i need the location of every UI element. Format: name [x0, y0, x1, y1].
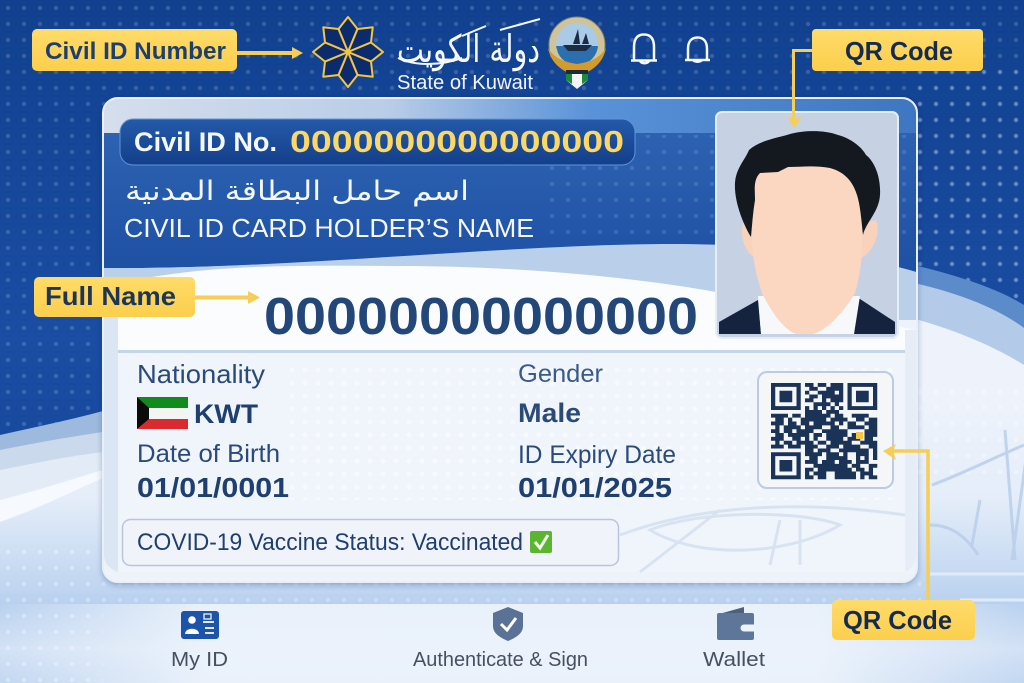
bridge backdrop	[930, 430, 1024, 600]
label text: Full Name	[45, 281, 176, 311]
label: qr code bottom	[832, 600, 975, 640]
gender value: Male	[518, 398, 581, 428]
date of birth label: Date of Birth	[137, 440, 280, 468]
label text: QR Code	[843, 605, 952, 635]
nationality label: Nationality	[137, 359, 265, 389]
card blue header	[104, 133, 916, 272]
arabic calligraphy: دولة الكويت	[397, 27, 540, 72]
check icon	[530, 531, 552, 553]
emblem disc	[556, 23, 598, 65]
nav: wallet	[703, 607, 765, 671]
jacket	[719, 297, 895, 334]
label: qr code top	[812, 29, 983, 71]
wallet label: Wallet	[703, 649, 765, 671]
calligraphy flourish	[398, 19, 540, 64]
shield icon	[493, 607, 523, 641]
nationality value: KWT	[194, 399, 259, 429]
card bridge watermark	[620, 507, 905, 572]
vaccine status box	[122, 520, 618, 566]
expiry value: 01/01/2025	[518, 472, 672, 503]
state of kuwait: State of Kuwait	[397, 72, 533, 94]
flag of Kuwait	[137, 397, 188, 429]
hair	[735, 131, 880, 237]
authenticate label: Authenticate & Sign	[413, 649, 588, 671]
qr code	[758, 372, 893, 488]
photo	[716, 112, 898, 338]
arabic holder name: اسم حامل البطاقة المدنية	[125, 176, 469, 207]
my id label: My ID	[171, 649, 228, 671]
civil id number pill	[120, 119, 635, 165]
civil id label: Civil ID No.	[134, 127, 277, 157]
qr modules	[771, 385, 877, 477]
english holder name: CIVIL ID CARD HOLDER’S NAME	[124, 213, 534, 243]
logo star	[313, 17, 383, 87]
emblem lower wings	[548, 48, 606, 77]
expiry label: ID Expiry Date	[518, 441, 676, 469]
label text: QR Code	[845, 36, 953, 66]
face	[752, 160, 862, 334]
card body	[103, 98, 917, 582]
nav: my id	[171, 611, 228, 671]
ID card	[103, 98, 917, 582]
card light wave	[104, 244, 916, 320]
kuwait emblem	[548, 17, 606, 89]
wallet icon	[717, 607, 754, 640]
label: civil id number	[32, 29, 237, 71]
qr card	[758, 372, 893, 488]
gender label: Gender	[518, 360, 603, 388]
dhow	[563, 29, 592, 51]
arrow: civil id number	[237, 47, 303, 59]
my id icon	[181, 611, 219, 639]
shield	[566, 71, 588, 89]
vaccine status text: COVID-19 Vaccine Status: Vaccinated	[137, 529, 523, 556]
lower card panel	[118, 352, 905, 572]
ears	[742, 220, 878, 258]
shirt	[758, 296, 860, 334]
civil id digits: 0000000000000000	[290, 124, 624, 159]
date of birth value: 01/01/0001	[137, 472, 289, 503]
bell icon 2	[685, 38, 710, 62]
emblem ring	[549, 17, 605, 73]
bell icon 1	[631, 34, 657, 63]
photo frame	[716, 112, 898, 338]
arrow: qr code to photo	[787, 50, 812, 128]
qr gold mark	[856, 432, 863, 439]
label text: Civil ID Number	[45, 38, 226, 65]
label: full name	[34, 277, 195, 317]
card top sheen	[104, 99, 916, 140]
arrow: full name	[195, 291, 260, 304]
full name digits: 00000000000000	[264, 288, 698, 346]
arrow: qr code bottom to qr	[883, 444, 928, 600]
nav: authenticate	[413, 607, 588, 671]
card white wave	[118, 266, 916, 352]
